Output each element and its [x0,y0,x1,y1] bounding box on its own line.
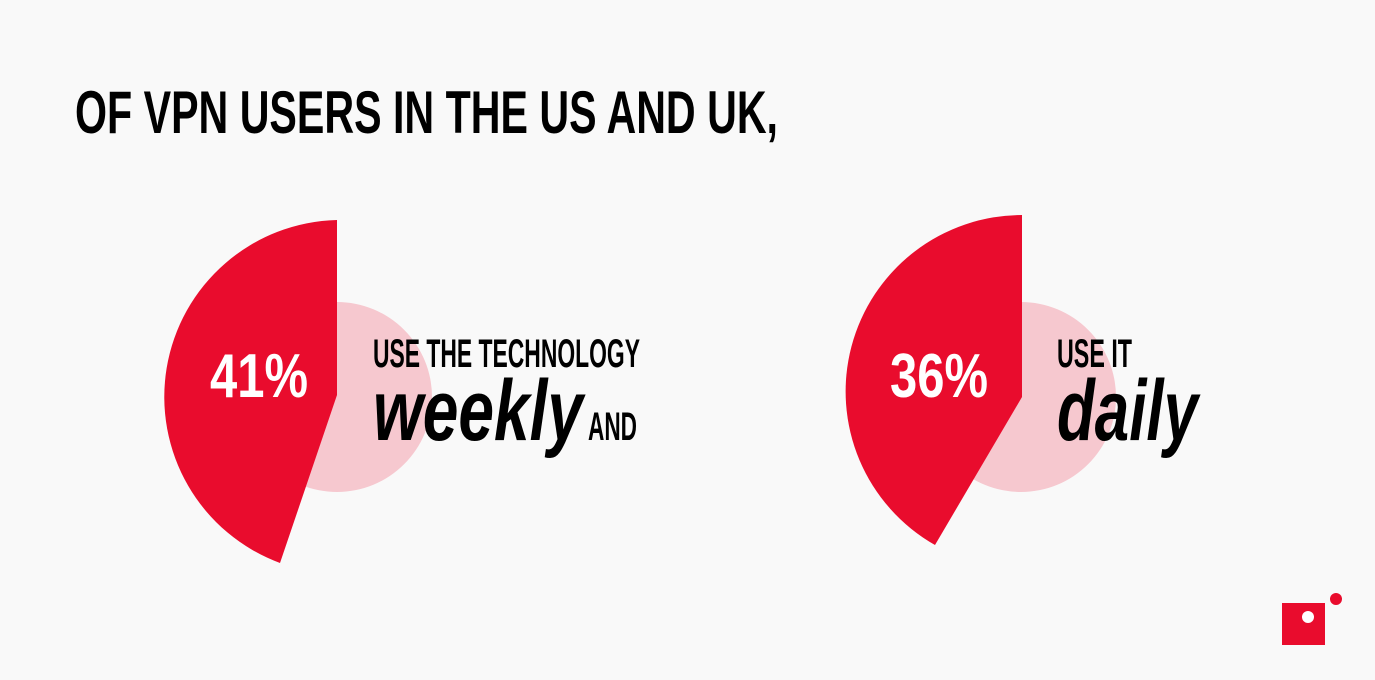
chart: 36% daily [846,215,1116,545]
text block: daily [1057,332,1201,459]
logo [1282,593,1342,645]
text block: weekly: USE THE TECHNOLOGY [373,332,640,376]
chart: 41% weekly [164,220,432,563]
label: 36%: 36% [890,342,988,411]
text block: weekly: weekly [373,363,586,459]
text block: daily: daily [1057,363,1201,459]
text block: daily: USE IT [1057,332,1132,376]
label: 41%: 41% [210,342,308,411]
title: OF VPN USERS IN THE US AND UK, [75,79,778,146]
text block: weekly: AND [588,405,637,449]
